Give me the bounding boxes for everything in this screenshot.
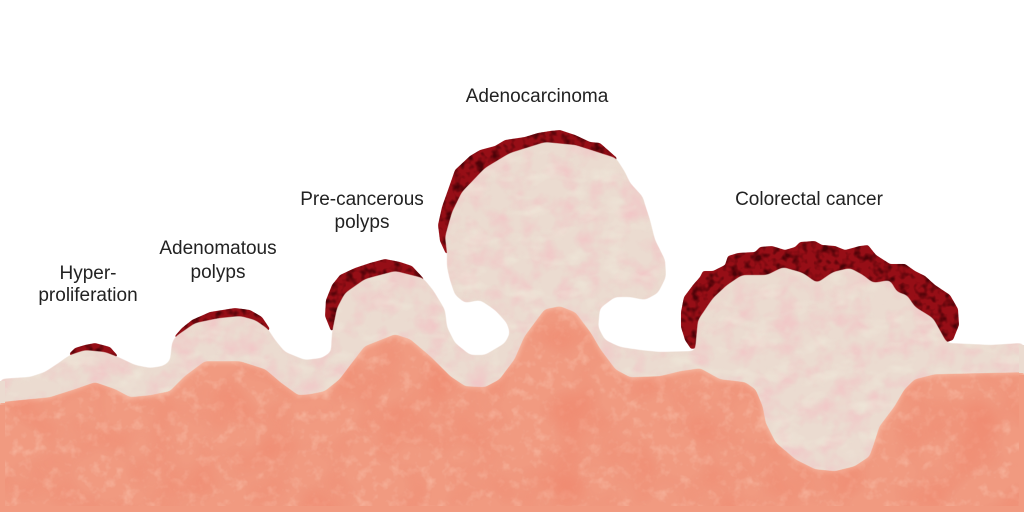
label: colorectal cancer: Colorectal cancer	[735, 189, 884, 210]
label: adenomatous polyps	[159, 238, 277, 283]
label: hyper-proliferation	[38, 263, 138, 306]
label: pre-cancerous polyps: Pre-cancerous	[300, 189, 424, 210]
label: pre-cancerous polyps: polyps	[335, 212, 389, 233]
cap: adenocarcinoma	[438, 130, 617, 254]
edge fill: bottom and side margins of the tissue	[0, 345, 1024, 512]
dysplastic cell caps	[69, 130, 959, 362]
cap: colorectal cancer	[681, 241, 959, 349]
label: hyper-proliferation: Hyper-	[59, 263, 117, 284]
cap: pre-cancerous polyps	[325, 259, 424, 331]
cap: adenomatous polyps	[174, 308, 270, 340]
cap: hyperproliferation	[69, 343, 118, 362]
stroma pink tissue	[0, 307, 1024, 512]
label: hyper-proliferation: proliferation	[38, 285, 138, 306]
label: adenocarcinoma: Adenocarcinoma	[466, 86, 609, 107]
label: adenomatous polyps: polyps	[191, 262, 245, 283]
label: pre-cancerous polyps	[300, 189, 424, 233]
epithelium cream layer	[0, 142, 1024, 512]
label: adenomatous polyps: Adenomatous	[159, 238, 277, 259]
